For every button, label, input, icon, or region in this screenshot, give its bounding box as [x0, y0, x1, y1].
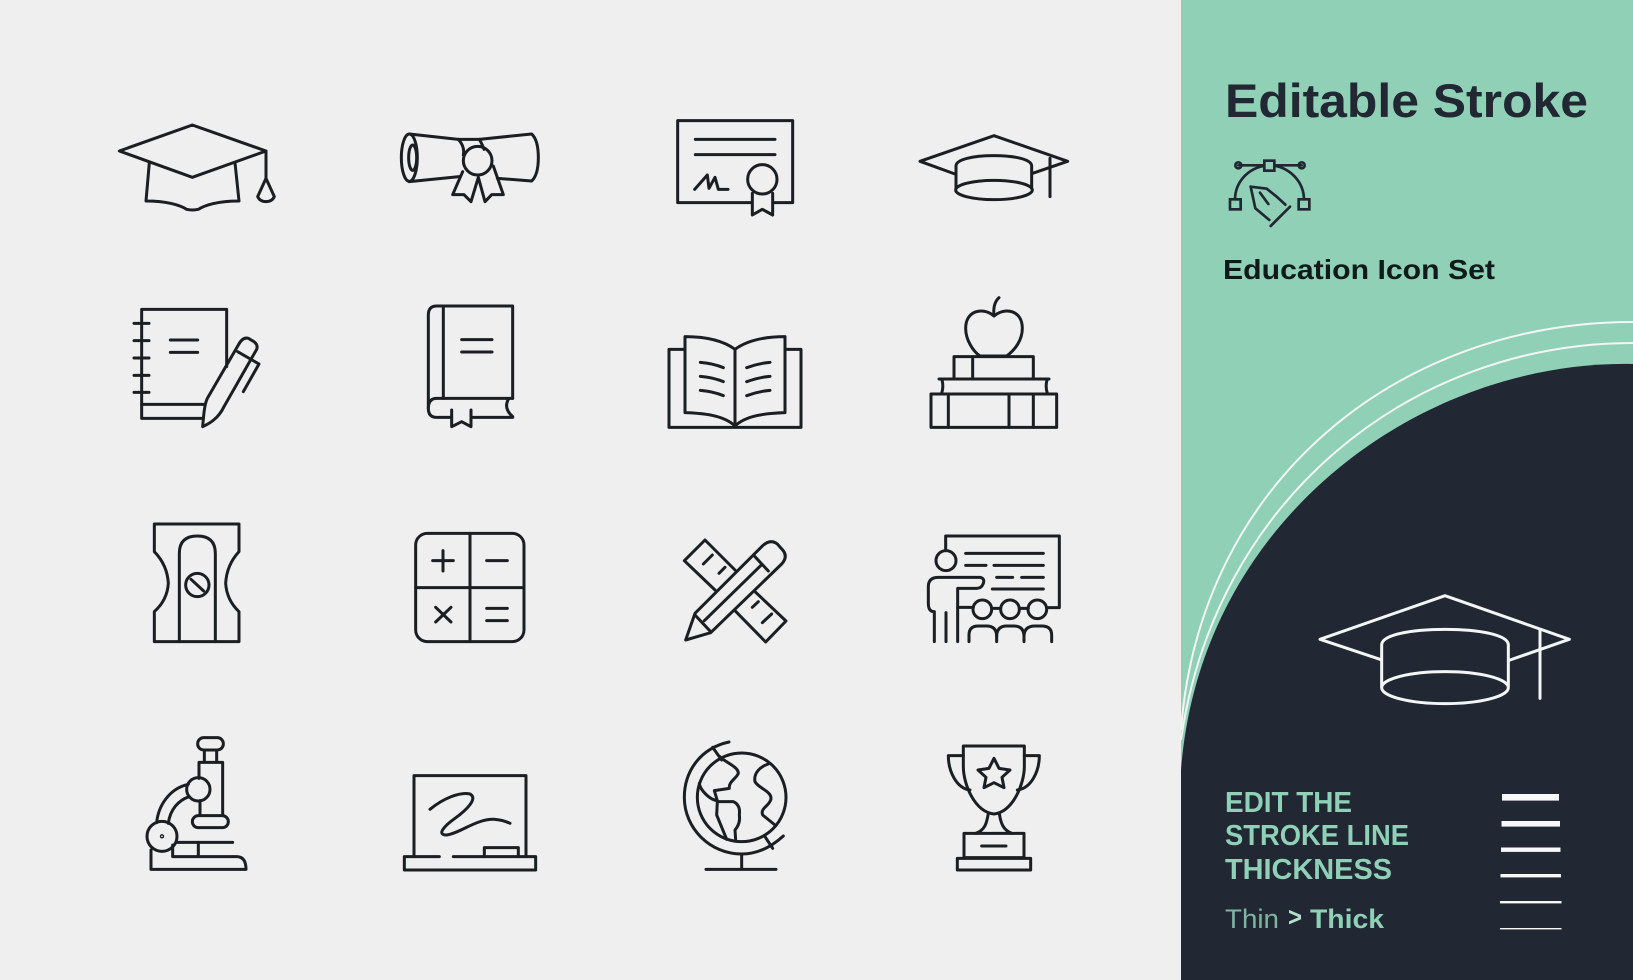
heading: Editable Stroke	[1225, 74, 1588, 127]
mint background	[1181, 0, 1633, 980]
icon: notebook and pen	[134, 309, 259, 427]
icon: microscope	[147, 738, 246, 869]
white curved lines	[1181, 322, 1633, 740]
text: thin to thick: Thick	[1310, 904, 1385, 934]
text: edit the stroke line thickness: STROKE LINE	[1225, 820, 1409, 852]
stroke thickness samples	[1500, 794, 1562, 929]
panel: sidebar	[1181, 0, 1633, 980]
icon: diploma scroll	[401, 134, 538, 202]
icon: large graduation cap	[1320, 596, 1569, 704]
icon: desk globe	[684, 742, 786, 869]
icon: calculator symbols	[416, 533, 524, 642]
icon: closed book with bookmark	[428, 306, 513, 427]
text: edit the stroke line thickness: THICKNESS	[1225, 854, 1392, 886]
text: edit the stroke line thickness	[1225, 787, 1409, 886]
subheading: Education Icon Set	[1223, 254, 1495, 285]
icon: trophy with star	[948, 746, 1039, 870]
icon: bezier pen tool	[1230, 161, 1309, 226]
text: edit the stroke line thickness: EDIT THE	[1225, 787, 1352, 819]
icon: chalkboard	[404, 776, 536, 870]
icon: apple on stack of books	[931, 298, 1057, 427]
icon: teacher and students at board	[928, 536, 1059, 642]
text: thin to thick: >	[1288, 902, 1302, 932]
icon: certificate	[678, 121, 793, 215]
icon: open book	[669, 337, 801, 427]
text: thin to thick	[1225, 902, 1385, 934]
icon: mortarboard with tassel	[119, 125, 274, 210]
dark curved panel	[1181, 364, 1633, 980]
text: thin to thick: Thin	[1225, 904, 1279, 934]
panel: icon grid	[119, 121, 1068, 870]
icon: crossed pencil and ruler	[684, 540, 786, 642]
icon: graduation cap	[920, 136, 1068, 200]
icon: pencil sharpener	[154, 524, 239, 642]
